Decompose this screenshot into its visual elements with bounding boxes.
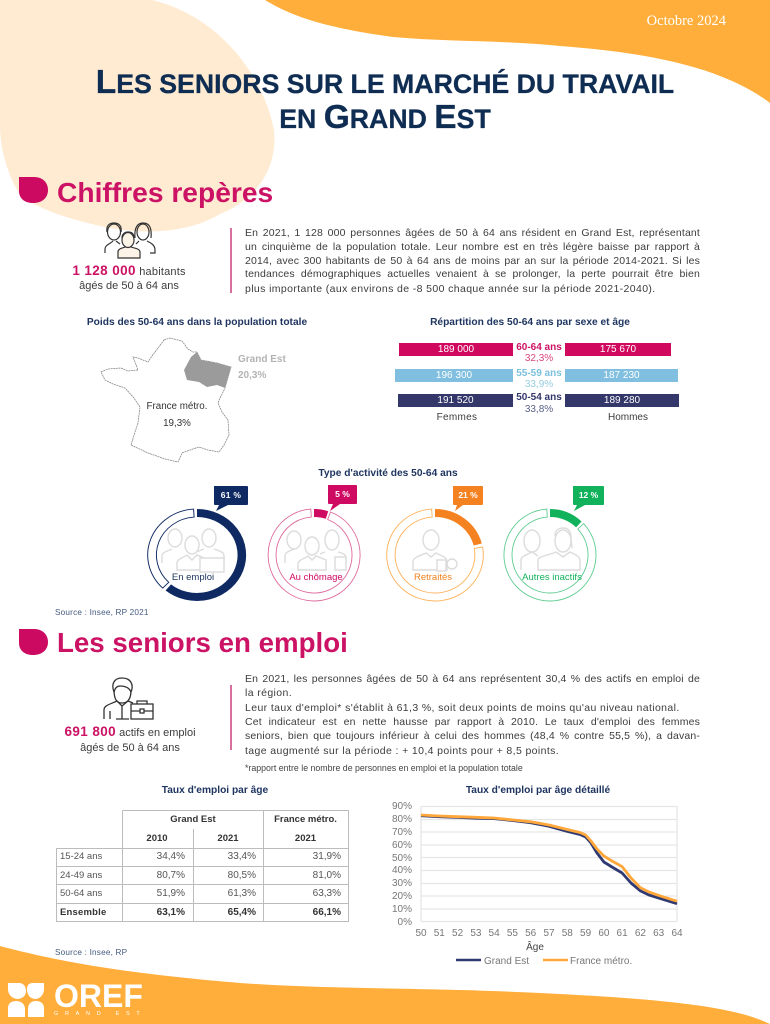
chart heading: poids: Poids des 50-64 ans dans la population totale	[87, 317, 307, 328]
line chart: taux d'emploi par âge détaillé: 50%	[392, 853, 412, 864]
table: taux d'emploi par âge: France métro.	[274, 814, 337, 825]
age label 60-64: 60-64 ans	[516, 342, 562, 353]
bar: femmes 50-54: 191 520	[437, 395, 474, 406]
logo subtitle: GRAND EST	[54, 1011, 146, 1017]
age label 60-64	[516, 342, 562, 364]
logo: OREF Grand Est	[8, 978, 146, 1017]
text block: seniors en emploi: la région.	[245, 687, 292, 699]
chart heading: taux d'emploi détaillé: Taux d'emploi par âge détaillé	[466, 785, 610, 796]
age label 55-59: 55-59 ans	[516, 368, 562, 379]
row 15-24: 15-24 ans	[60, 851, 102, 862]
line chart: taux d'emploi par âge détaillé: 30%	[392, 878, 412, 889]
age label 50-54	[516, 392, 562, 415]
line chart: taux d'emploi par âge détaillé	[392, 801, 683, 967]
table: taux d'emploi par âge: 65,4%	[228, 907, 256, 918]
map label: Grand Est: Grand Est	[238, 354, 286, 365]
text block: seniors en emploi: Leur taux d'emploi* s'établit à 61,3 %, soit deux points de moins qu'au niveau national.	[245, 702, 680, 714]
text block: chiffres repères: plus importante (aux environs de -8 500 chaque année sur la période 2021-2040).	[245, 283, 656, 295]
text block: seniors en emploi	[245, 673, 700, 757]
line chart: taux d'emploi par âge détaillé: 80%	[392, 814, 412, 825]
bar: hommes 60-64: 175 670	[600, 344, 636, 355]
chart heading: répartition: Répartition des 50-64 ans par sexe et âge	[430, 317, 630, 328]
bar: hommes 55-59	[565, 369, 678, 382]
line chart: taux d'emploi par âge détaillé: 0%	[398, 917, 412, 928]
line chart: taux d'emploi par âge détaillé: 20%	[392, 891, 412, 902]
age label 50-54: 50-54 ans	[516, 392, 562, 403]
label: en emploi: En emploi	[172, 572, 214, 583]
table: taux d'emploi par âge: 80,5%	[228, 870, 256, 881]
line chart: taux d'emploi par âge détaillé: 70%	[392, 827, 412, 838]
callout: 5 %: 5 %	[335, 489, 350, 499]
label: au chômage: Au chômage	[289, 572, 343, 583]
bar: femmes 60-64: 189 000	[438, 344, 474, 355]
icon: group of people	[104, 222, 156, 259]
donut: en emploi	[147, 486, 248, 601]
text block: seniors en emploi: Cet indicateur est en nette hausse par rapport à 2010. Le taux d'emploi des femmes	[245, 716, 700, 728]
table: taux d'emploi par âge: 63,1%	[157, 907, 185, 918]
donut: au chômage	[268, 485, 361, 602]
key figure: habitants: 1 128 000 habitants	[72, 263, 186, 278]
line chart: taux d'emploi par âge détaillé: 60	[598, 928, 610, 939]
bar: femmes 50-54	[398, 394, 513, 407]
callout: 21 %: 21 %	[458, 490, 478, 500]
text block: chiffres repères: En 2021, 1 128 000 personnes âgées de 50 à 64 ans résident en Grand Est, représentant	[245, 227, 700, 239]
line chart: taux d'emploi par âge détaillé: 53	[470, 928, 482, 939]
bar chart: sex and age	[395, 342, 679, 423]
title: LES SENIORS SUR LE MARCHÉ DU TRAVAIL	[96, 64, 674, 101]
table: taux d'emploi par âge: 34,4%	[157, 851, 185, 862]
key figure: actifs en emploi: 691 800 actifs en emploi	[64, 724, 196, 739]
heading: seniors en emploi: Les seniors en emploi	[57, 627, 348, 658]
row ensemble: Ensemble	[60, 907, 106, 918]
map label: France	[146, 401, 207, 429]
section bullet: chiffres repères	[19, 177, 48, 203]
bar: femmes 60-64	[399, 343, 513, 356]
table: taux d'emploi par âge: 81,0%	[313, 870, 341, 881]
line chart: taux d'emploi par âge détaillé: 55	[507, 928, 518, 939]
bar: hommes 50-54	[565, 394, 679, 407]
section bullet: seniors en emploi	[19, 629, 48, 655]
table: taux d'emploi par âge: 2010	[146, 833, 168, 844]
bar: femmes 55-59: 196 300	[436, 370, 472, 381]
map label: Grand Est	[238, 354, 286, 381]
line chart: taux d'emploi par âge détaillé: 40%	[392, 865, 412, 876]
table header: Grand Est	[170, 814, 216, 825]
line chart: taux d'emploi par âge détaillé: 60%	[392, 840, 412, 851]
title	[96, 64, 674, 136]
title: EN GRAND EST	[279, 99, 491, 136]
caption: age group: âgés de 50 à 64 ans	[80, 742, 180, 754]
line chart: taux d'emploi par âge détaillé: 64	[671, 928, 683, 939]
table: taux d'emploi par âge: 51,9%	[157, 888, 185, 899]
line chart: taux d'emploi par âge détaillé: 50	[415, 928, 427, 939]
bar: hommes 60-64	[565, 343, 671, 356]
table: taux d'emploi par âge: 31,9%	[313, 851, 341, 862]
rule	[230, 228, 232, 293]
map label: France: France métro.	[146, 401, 207, 412]
chart heading: type d'activité: Type d'activité des 50-64 ans	[318, 468, 458, 479]
date: Octobre 2024	[647, 13, 726, 29]
line chart: taux d'emploi par âge détaillé: 56	[525, 928, 537, 939]
label femmes: Femmes	[437, 412, 477, 423]
label hommes: Hommes	[608, 412, 648, 423]
label: autres inactifs: Autres inactifs	[522, 572, 582, 583]
line chart: taux d'emploi par âge détaillé: 59	[580, 928, 592, 939]
line chart: taux d'emploi par âge détaillé: 90%	[392, 801, 412, 812]
bar: hommes 55-59: 187 230	[603, 370, 640, 381]
table: taux d'emploi par âge: 66,1%	[313, 907, 341, 918]
table: taux d'emploi par âge	[56, 810, 349, 922]
donut: autres inactifs	[504, 486, 604, 602]
callout: 12 %: 12 %	[579, 490, 598, 500]
icon: man with briefcase	[103, 677, 154, 720]
table: taux d'emploi par âge: 80,7%	[157, 870, 185, 881]
line chart: taux d'emploi par âge détaillé: France métro.	[570, 956, 632, 967]
heading: chiffres repères: Chiffres repères	[57, 176, 273, 208]
table: taux d'emploi par âge: 2021	[217, 833, 239, 844]
bar: hommes 50-54: 189 280	[604, 395, 640, 406]
age label 55-59	[516, 368, 562, 390]
line chart: taux d'emploi par âge détaillé: 57	[543, 928, 555, 939]
text block: chiffres repères: tendances démographiques actuelles venaient à se prolonger, la perte pourrait être bien	[245, 268, 700, 280]
footnote: *rapport entre le nombre de personnes en emploi et la population totale	[245, 763, 523, 773]
table: taux d'emploi par âge: 33,4%	[228, 851, 256, 862]
table: taux d'emploi par âge: 61,3%	[228, 888, 256, 899]
line chart: taux d'emploi par âge détaillé: 52	[452, 928, 464, 939]
line chart: taux d'emploi par âge détaillé: 58	[562, 928, 573, 939]
age label 55-59: 33,9%	[525, 379, 553, 390]
caption: age group: âgés de 50 à 64 ans	[79, 280, 179, 292]
bar: femmes 55-59	[395, 369, 513, 382]
map label: France: 19,3%	[163, 418, 191, 429]
source: Source : Insee, RP	[55, 948, 127, 957]
text block: seniors en emploi: En 2021, les personnes âgées de 50 à 64 ans représentent 30,4 % des actifs en emploi de	[245, 673, 700, 685]
line chart: taux d'emploi par âge détaillé: 51	[434, 928, 445, 939]
age label 50-54: 33,8%	[525, 404, 553, 415]
rule	[230, 685, 232, 750]
row 50-64: 50-64 ans	[60, 888, 102, 899]
row 24-49: 24-49 ans	[60, 870, 102, 881]
text block: chiffres repères	[245, 227, 700, 295]
text block: seniors en emploi: seniors, bien que toujours inférieur à celui des hommes (48,4 % contre 55,5 %), a davan-	[245, 730, 700, 742]
map of France	[100, 338, 232, 462]
text block: chiffres repères: un cinquième de la population totale. Leur nombre est en très légère baisse par rapport à	[245, 241, 700, 253]
line chart: taux d'emploi par âge détaillé: 10%	[392, 904, 412, 915]
age label 60-64: 32,3%	[525, 353, 553, 364]
donut: retraités	[386, 486, 484, 602]
chart heading: taux d'emploi par âge: Taux d'emploi par âge	[162, 785, 268, 796]
line chart: taux d'emploi par âge détaillé: Grand Est	[484, 956, 529, 967]
table: taux d'emploi par âge: 63,3%	[313, 888, 341, 899]
source: Source : Insee, RP 2021	[55, 608, 149, 617]
line chart: taux d'emploi par âge détaillé: 54	[489, 928, 500, 939]
line chart: taux d'emploi par âge détaillé: 63	[653, 928, 665, 939]
label: retraités: Retraités	[414, 572, 452, 583]
line chart: taux d'emploi par âge détaillé: 62	[635, 928, 646, 939]
table: taux d'emploi par âge: 2021	[295, 833, 316, 844]
logo wordmark: OREF	[54, 978, 143, 1014]
map label: Grand Est: 20,3%	[238, 370, 266, 381]
line chart: taux d'emploi par âge détaillé: Âge	[526, 940, 544, 953]
line chart: taux d'emploi par âge détaillé: 61	[617, 928, 628, 939]
logo mark	[8, 983, 44, 1017]
callout: 61 %: 61 %	[221, 490, 241, 500]
text block: chiffres repères: 2014, avec 300 habitants de 50 à 64 ans de moins par an sur la période 2014-2021. Si les	[245, 255, 700, 267]
text block: seniors en emploi: tage augmenté sur la période : + 10,4 points pour + 8,5 points.	[245, 745, 559, 757]
